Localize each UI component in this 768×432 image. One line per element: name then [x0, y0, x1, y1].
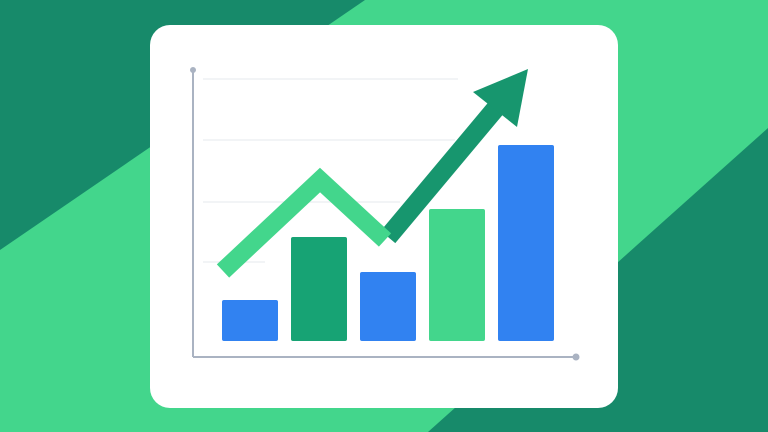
axes: [191, 68, 578, 360]
arrow: trend: [223, 69, 528, 271]
panel: chart card: [150, 25, 618, 408]
bar chart: [222, 145, 554, 341]
